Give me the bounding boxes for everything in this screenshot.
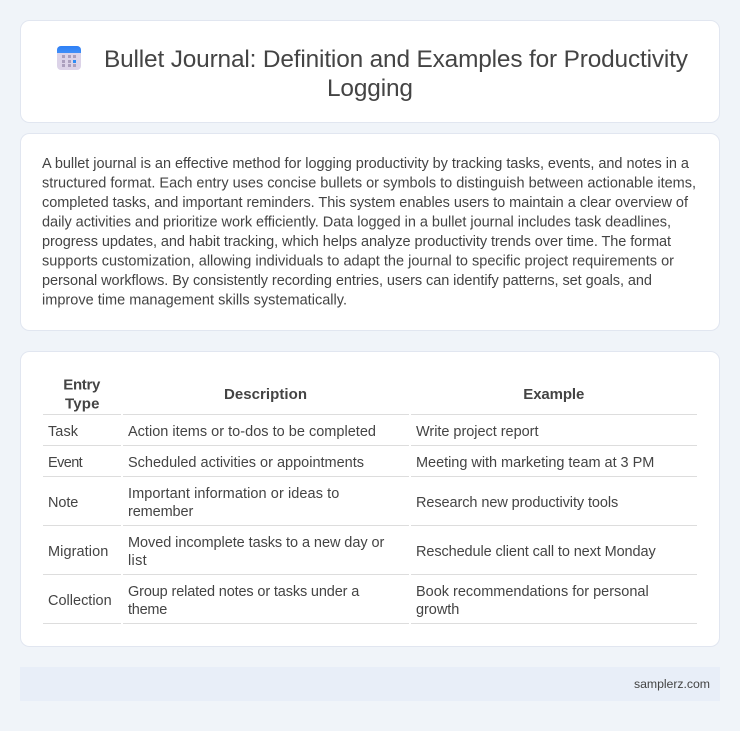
footer source text: samplerz.com (634, 677, 710, 691)
title: Logging (327, 75, 413, 102)
row: Collection: Book recommendations for personal (416, 584, 649, 600)
text block: bullet journal overview: personal workflows. By consistently recording entries, users can identify patterns, set goals, and (42, 273, 652, 289)
row: Migration: Moved incomplete tasks to a new day or (128, 535, 384, 551)
header panel (20, 20, 720, 122)
row: Event: Scheduled activities or appointments (128, 455, 364, 471)
row: Collection: Group related notes or tasks under a (128, 584, 360, 600)
text block: bullet journal overview: improve time management skills systematically. (42, 292, 347, 308)
text block: bullet journal overview (42, 156, 696, 308)
table header: Example (523, 386, 584, 403)
row: Task: Action items or to-dos to be completed (128, 424, 376, 440)
table header: Type (65, 396, 100, 413)
text block: bullet journal overview: supports customization, allowing individuals to adapt the journal to specific project requirements or (42, 254, 674, 270)
table header: Description (224, 386, 307, 403)
text block: bullet journal overview: progress updates, and habit tracking, which helps analyze productivity trends over time. The format (42, 234, 671, 250)
row: Collection: theme (128, 602, 167, 618)
title: Bullet Journal: Definition and Examples for Productivity (104, 46, 689, 73)
row: Collection (43, 584, 697, 624)
row: Event: Event (48, 455, 83, 471)
row: Note (43, 486, 697, 526)
panel: entry type table (20, 352, 720, 646)
row: Event: Meeting with marketing team at 3 PM (416, 455, 654, 471)
row: Migration: list (128, 553, 147, 569)
row: Migration: Migration (48, 544, 108, 560)
row: Migration: Reschedule client call to next Monday (416, 544, 656, 560)
row: Task (43, 424, 697, 446)
row: Note: Research new productivity tools (416, 495, 618, 511)
row: Note: Important information or ideas to (128, 486, 339, 502)
row: Collection: Collection (48, 593, 112, 609)
row: Migration (43, 535, 697, 575)
row: Collection: growth (416, 602, 459, 618)
text block: bullet journal overview: A bullet journal is an effective method for logging productivity by tracking tasks, events, and notes in a (42, 156, 690, 172)
panel: description (20, 134, 720, 330)
table header: Entry (63, 376, 101, 394)
row: Note: Note (48, 495, 78, 511)
icon: calendar (57, 46, 81, 70)
row: Event (43, 455, 697, 477)
row: Task: Task (48, 424, 79, 440)
title (104, 46, 689, 102)
text block: bullet journal overview: structured format. Each entry uses concise bullets or symbols to distinguish between actionable items, (42, 176, 696, 192)
text block: bullet journal overview: completed tasks, and important reminders. This system enables users to maintain a clear overview of (42, 195, 689, 211)
text block: bullet journal overview: daily activities and prioritize work efficiently. Data logged in a bullet journal includes task deadlines, (42, 214, 671, 230)
table header (43, 376, 697, 415)
row: Note: remember (128, 504, 193, 520)
row: Task: Write project report (416, 424, 538, 440)
footer bar (20, 667, 720, 701)
